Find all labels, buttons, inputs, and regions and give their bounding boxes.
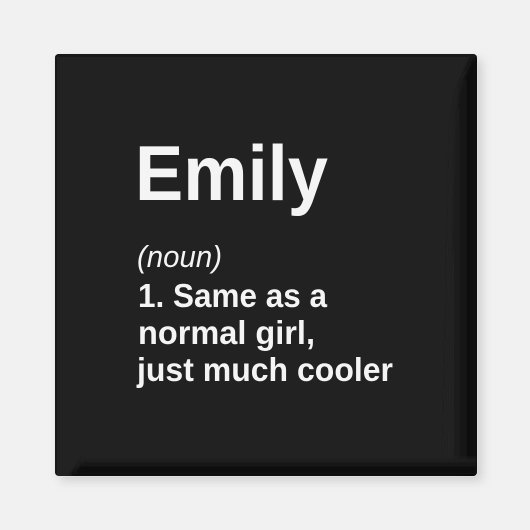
definition: just much cooler (136, 351, 393, 388)
title: Emily (135, 129, 328, 217)
definition: normal girl, (138, 314, 315, 351)
magnet panel (54, 54, 482, 481)
definition (136, 277, 393, 388)
definition: 1. Same as a (138, 277, 328, 314)
part of speech: (noun) (137, 239, 222, 274)
